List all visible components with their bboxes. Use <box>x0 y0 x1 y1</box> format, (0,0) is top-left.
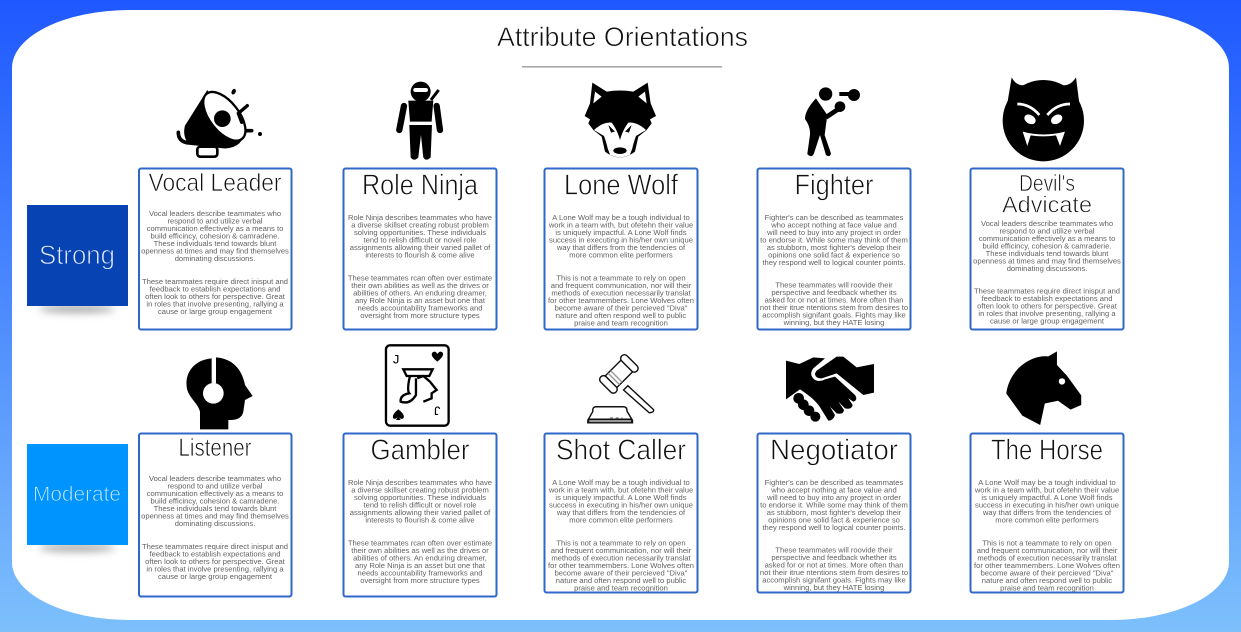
card: Fighter: as stubborn, most fighter's develop their <box>767 243 902 252</box>
card: Vocal Leader: communication effectively as a means to <box>147 224 283 233</box>
card: Listener: These individuals tend towards blunt <box>154 504 277 513</box>
card: Devil's Advicate: communication effectively as a means to <box>979 234 1115 243</box>
card: Negotiator: Negotiator <box>770 434 898 466</box>
card: Negotiator: winning, but they HATE losing <box>783 583 884 592</box>
card: Role Ninja: Role Ninja describes teammates who have <box>348 213 492 222</box>
card: The Horse: work in a team with, but ofetehn their value <box>974 486 1119 494</box>
card: Fighter: who accept nothing at face value and <box>770 220 897 230</box>
card: Lone Wolf: is uniquely impactful. A Lone Wolf finds <box>555 228 687 237</box>
card: Listener <box>139 434 292 596</box>
card: Lone Wolf: more common elite performers <box>569 250 673 260</box>
card: Devil's Advicate: feedback to establish expectations and <box>982 294 1112 303</box>
card: Gambler: tend to relish difficult or novel role <box>364 500 476 510</box>
card: Devil's Advicate: cause or large group engagement <box>990 316 1105 326</box>
card: Lone Wolf: become aware of their percieved "Diva" <box>555 304 688 312</box>
card: Negotiator: who accept nothing at face value and <box>770 486 897 494</box>
card: The Horse: is uniquely impactful. A Lone Wolf finds <box>981 493 1113 502</box>
card: Vocal Leader <box>139 168 292 330</box>
card: Lone Wolf: way that differs from the tendencies of <box>556 243 686 252</box>
icon: megaphone <box>178 85 262 157</box>
card: Devil's Advicate: respond to and utilize verbal <box>1000 226 1095 236</box>
card: Negotiator: to endorse it. While some may think of them <box>760 500 908 510</box>
card: Shot Caller: way that differs from the tendencies of <box>556 508 686 517</box>
icon: jack playing card: J <box>433 402 441 417</box>
card: Gambler: Role Ninja describes teammates who have <box>348 478 492 487</box>
card: Listener: cause or large group engagement <box>158 572 273 581</box>
card: The Horse: praise and team recognition <box>1000 584 1094 592</box>
card: Devil's Advicate: These teammates require direct inisput and <box>974 286 1120 296</box>
card: Vocal Leader: often look to others for perspective. Great <box>145 292 286 301</box>
card: Devil's Advicate: openness at times and may find themselves <box>973 256 1121 266</box>
icon: devil <box>1003 77 1084 161</box>
icon: boxer <box>805 87 860 156</box>
card: Fighter: Fighter <box>794 170 874 202</box>
card: Fighter: accomplish signifant goals. Fights may like <box>762 310 906 320</box>
card: Role Ninja: These teammates rcan often over estimate <box>348 274 492 282</box>
icon: handshake <box>786 357 874 422</box>
card: Listener: openness at times and may find themselves <box>141 512 289 520</box>
card: Role Ninja: oversight from more structure types <box>360 311 480 320</box>
card: Role Ninja: assignments allowing their varied pallet of <box>350 243 491 252</box>
card: Role Ninja: needs accountability frameworks and <box>358 304 482 312</box>
card: Vocal Leader: respond to and utilize verbal <box>168 216 263 226</box>
card: Gambler: abilities of others. An enduring dreamer, <box>353 554 487 562</box>
card: Gambler: oversight from more structure types <box>360 576 480 585</box>
card: Negotiator: perspective and feedback whether its <box>771 553 897 562</box>
card: Gambler: needs accountability frameworks and <box>358 568 482 578</box>
card: Role Ninja: abilities of others. An enduring dreamer, <box>353 288 487 298</box>
card: Gambler: assignments allowing their varied pallet of <box>350 508 491 517</box>
card: Gambler: any Role Ninja is an asset but one that <box>355 561 486 570</box>
card: Devil's Advicate <box>970 168 1124 330</box>
card: Lone Wolf: A Lone Wolf may be a tough individual to <box>552 213 690 222</box>
card: Role Ninja <box>344 168 496 330</box>
card: Lone Wolf <box>544 168 698 330</box>
card: The Horse: This is not a teammate to rely on open <box>982 538 1112 548</box>
card: Shot Caller: methods of execution necessarily translat <box>551 554 692 562</box>
card: Shot Caller: more common elite performers <box>569 516 673 524</box>
card: Negotiator: will need to buy into any project in order <box>766 493 901 502</box>
level label: Moderate: Moderate <box>33 483 121 506</box>
card: Role Ninja: their own abilities as well as the drives or <box>351 281 489 290</box>
card: Gambler: solving opportunities. These individuals <box>354 493 486 502</box>
card: Lone Wolf: for other teammembers. Lone Wolves often <box>548 296 694 305</box>
card: Vocal Leader: openness at times and may find themselves <box>141 246 289 256</box>
card: Vocal Leader: These individuals tend towards blunt <box>154 239 277 248</box>
card: Negotiator: Fighter's can be described as teammates <box>765 478 904 487</box>
card: The Horse: for other teammembers. Lone Wolves often <box>974 561 1120 570</box>
card: Vocal Leader: cause or large group engagement <box>158 307 273 316</box>
card: Shot Caller <box>544 434 698 592</box>
card: Role Ninja: tend to relish difficult or novel role <box>364 236 476 244</box>
card: Shot Caller: for other teammembers. Lone Wolves often <box>548 561 694 570</box>
icon: headset head <box>186 357 253 429</box>
card: Vocal Leader: in roles that involve presenting, rallying a <box>146 300 284 308</box>
card: Listener: feedback to establish expectations and <box>150 550 280 558</box>
card: Fighter: they respond well to logical counter points. <box>762 258 906 267</box>
card: Devil's Advicate: in roles that involve presenting, rallying a <box>978 309 1116 318</box>
card: Listener: Listener <box>178 434 252 462</box>
card: Shot Caller: become aware of their percieved "Diva" <box>555 568 688 578</box>
card: The Horse: methods of execution necessarily translat <box>977 554 1118 562</box>
card: Role Ninja: Role Ninja <box>362 170 479 202</box>
card: Fighter: will need to buy into any project in order <box>766 228 901 237</box>
title: Attribute Orientations <box>497 22 748 52</box>
card: The Horse: more common elite performers <box>995 516 1099 524</box>
card: Role Ninja: a diverse skillset creating robust problem <box>351 220 489 230</box>
card: Negotiator: accomplish signifant goals. Fights may like <box>762 576 906 584</box>
level label: Strong: Strong <box>39 240 115 270</box>
card: The Horse: way that differs from the tendencies of <box>982 508 1112 517</box>
card: Gambler: their own abilities as well as the drives or <box>351 546 489 555</box>
card: Lone Wolf: Lone Wolf <box>564 170 679 202</box>
card: Gambler: Gambler <box>370 434 470 466</box>
card: Listener: often look to others for perspective. Great <box>145 557 286 566</box>
card: Shot Caller: Shot Caller <box>556 434 686 466</box>
card: Devil's Advicate: Vocal leaders describe teammates who <box>981 219 1113 228</box>
card: Fighter: These teammates will roovide their <box>775 280 893 290</box>
card: Vocal Leader: These teammates require direct inisput and <box>142 277 288 286</box>
card: Listener: respond to and utilize verbal <box>168 482 263 490</box>
card: Vocal Leader: Vocal leaders describe teammates who <box>149 209 281 218</box>
card: The Horse: The Horse <box>991 434 1103 466</box>
card: Gambler: These teammates rcan often over estimate <box>348 538 492 548</box>
card: Lone Wolf: success in executing in his/her own unique <box>549 236 693 244</box>
card: Negotiator: they respond well to logical counter points. <box>762 523 906 532</box>
card: Negotiator: These teammates will roovide their <box>775 546 893 554</box>
card: Vocal Leader: build efficincy, cohesion & camradene. <box>151 232 279 240</box>
card: Negotiator: opinions one solid fact & experience so <box>768 516 900 524</box>
card: Shot Caller: is uniquely impactful. A Lone Wolf finds <box>555 493 687 502</box>
card: Fighter: winning, but they HATE losing <box>783 318 884 327</box>
card: The Horse: nature and often respond well to public <box>982 576 1112 585</box>
level label: Moderate <box>27 444 128 552</box>
card: The Horse <box>970 434 1124 592</box>
card: Role Ninja: any Role Ninja is an asset but one that <box>355 296 486 305</box>
card: Negotiator <box>758 434 910 592</box>
icon: gavel <box>588 353 654 423</box>
icon: horse head <box>1006 351 1081 425</box>
card: The Horse: and frequent communication, nor will their <box>977 546 1118 555</box>
card: Vocal Leader: dominating discussions. <box>175 254 255 263</box>
card: Devil's Advicate: often look to others for perspective. Great <box>977 302 1118 310</box>
card: Gambler: a diverse skillset creating robust problem <box>351 486 489 494</box>
card: Negotiator: not their itrue ntentions stem from desires to <box>760 568 908 577</box>
card: Listener: dominating discussions. <box>175 519 255 528</box>
card: Devil's Advicate: Devil's <box>1019 170 1075 196</box>
icon: ninja <box>399 82 440 160</box>
card: Fighter: asked for or not at times. More often than <box>765 296 903 304</box>
card: Role Ninja: interests to flourish & come alive <box>365 250 475 260</box>
card: Listener: communication effectively as a means to <box>147 489 283 498</box>
card: Fighter: opinions one solid fact & experience so <box>768 250 900 260</box>
card: Fighter: Fighter's can be described as teammates <box>765 213 904 222</box>
card: Vocal Leader: feedback to establish expectations and <box>150 284 280 294</box>
card: Listener: These teammates require direct inisput and <box>142 542 288 551</box>
card: Lone Wolf: praise and team recognition <box>574 318 668 328</box>
card: Fighter <box>758 168 910 330</box>
card: Lone Wolf: This is not a teammate to rely on open <box>556 274 686 282</box>
card: Shot Caller: praise and team recognition <box>574 584 668 592</box>
card: Shot Caller: success in executing in his/her own unique <box>549 500 693 510</box>
card: Shot Caller: A Lone Wolf may be a tough individual to <box>552 478 690 487</box>
card: Lone Wolf: nature and often respond well to public <box>556 311 686 320</box>
card: Devil's Advicate: dominating discussions. <box>1007 264 1087 273</box>
icon: wolf <box>585 83 656 157</box>
card: Fighter: perspective and feedback whether its <box>771 288 897 297</box>
card: Gambler: interests to flourish & come alive <box>365 516 475 524</box>
card: Negotiator: as stubborn, most fighter's develop their <box>767 508 902 517</box>
card: Gambler <box>344 434 496 596</box>
icon: jack playing card <box>386 345 449 426</box>
card: Listener: Vocal leaders describe teammates who <box>149 474 281 483</box>
card: Listener: in roles that involve presenting, rallying a <box>146 564 284 574</box>
card: Shot Caller: work in a team with, but ofetehn their value <box>548 486 693 494</box>
card: Lone Wolf: and frequent communication, nor will their <box>551 281 692 290</box>
card: Negotiator: asked for or not at times. More often than <box>765 560 903 570</box>
card: The Horse: become aware of their percieved "Diva" <box>981 568 1114 578</box>
card: The Horse: A Lone Wolf may be a tough individual to <box>978 478 1116 487</box>
card: Shot Caller: and frequent communication, nor will their <box>551 546 692 555</box>
card: Listener: build efficincy, cohesion & camradene. <box>151 496 279 506</box>
card: Shot Caller: This is not a teammate to rely on open <box>556 538 686 548</box>
card: Devil's Advicate: These individuals tend towards blunt <box>986 249 1109 258</box>
card: Devil's Advicate: build efficincy, cohesion & camraderie. <box>983 242 1111 250</box>
card: Devil's Advicate: Advicate <box>1002 192 1092 218</box>
card: Fighter: to endorse it. While some may think of them <box>760 236 908 244</box>
card: Vocal Leader: Vocal Leader <box>148 169 282 197</box>
card: Lone Wolf: methods of execution necessarily translat <box>551 288 692 298</box>
card: The Horse: success in executing in his/her own unique <box>975 500 1119 510</box>
level label: Strong <box>27 205 128 313</box>
icon: jack playing card: J <box>392 353 400 368</box>
card: Lone Wolf: work in a team with, but ofetehn their value <box>548 220 693 230</box>
card: Fighter: not their itrue ntentions stem from desires to <box>760 303 908 312</box>
card: Role Ninja: solving opportunities. These individuals <box>354 228 486 237</box>
card: Shot Caller: nature and often respond well to public <box>556 576 686 585</box>
